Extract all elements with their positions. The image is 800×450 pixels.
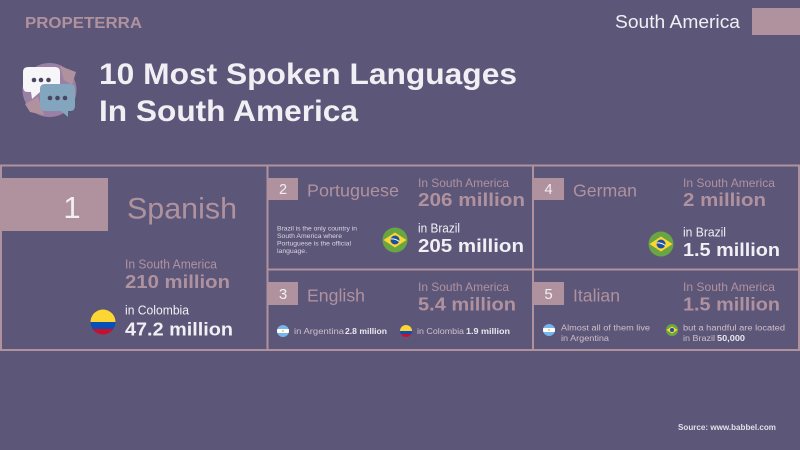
language name: English: English (307, 286, 365, 306)
language name: Portuguese: Portuguese (307, 180, 399, 200)
stat: Colombia: in Colombia (125, 304, 189, 318)
stat: Colombia (125, 304, 233, 340)
icon: Argentina flag (543, 324, 555, 336)
stat: Colombia: in Colombia (417, 327, 465, 336)
stat: Brazil: 1.5 million (683, 240, 780, 260)
note: Brazil: but a handful are located (683, 324, 785, 332)
rank badge 5 (534, 282, 564, 305)
language name: German: German (573, 180, 637, 200)
rank badge 1 (0, 178, 108, 231)
icon: Brazil flag (382, 228, 408, 252)
icon: speech bubbles (22, 63, 76, 117)
stat: South America total (125, 258, 230, 292)
stat: South America total: 2 million (683, 190, 766, 210)
title (99, 58, 517, 128)
note: Argentina: in Argentina (561, 334, 610, 343)
stat: South America total: 206 million (418, 190, 525, 210)
stat: South America total: In South America (125, 258, 217, 272)
panel: German (534, 176, 780, 260)
region label: South America: South America (615, 12, 741, 32)
stat: South America total (418, 280, 516, 314)
stat: Brazil (683, 226, 780, 260)
stat: South America total: In South America (683, 176, 775, 190)
note: official language: South America where (277, 234, 343, 240)
stat: South America total: In South America (418, 176, 509, 190)
note: Argentina: Almost all of them live (561, 324, 651, 332)
language name: Spanish: Spanish (127, 192, 237, 226)
rank number 5: 5 (544, 286, 553, 303)
stat: Argentina: 2.8 million (345, 327, 387, 336)
icon: Colombia flag (400, 325, 412, 337)
stat: South America total (418, 176, 525, 210)
stat: South America total: 1.5 million (683, 294, 780, 314)
note: official language (277, 226, 357, 255)
note: Brazil (683, 324, 785, 343)
icon: Brazil flag (648, 232, 674, 256)
note: official language: Brazil is the only country in (277, 226, 357, 232)
stat: Brazil (418, 222, 524, 256)
panel: Portuguese (268, 176, 525, 256)
panel: Italian (534, 280, 785, 343)
note: official language: Portuguese is the official (277, 242, 351, 248)
panel: English (268, 280, 516, 337)
stat: South America total: In South America (683, 280, 775, 294)
rank number 2: 2 (279, 182, 287, 198)
note: official language: language. (277, 249, 307, 255)
rank number 3: 3 (279, 286, 287, 303)
stat: Colombia: 47.2 million (125, 320, 233, 340)
title: In South America (99, 95, 359, 128)
source: Source: www.babbel.com (678, 423, 776, 432)
language name: Italian: Italian (573, 286, 620, 306)
panel: Spanish (0, 178, 237, 340)
rank number 4: 4 (544, 182, 553, 198)
stat: South America total (683, 176, 775, 210)
rank number 1: 1 (63, 190, 81, 225)
note: Brazil: in Brazil (683, 334, 715, 343)
stat: Brazil: in Brazil (418, 222, 460, 236)
icon: Brazil flag (666, 324, 678, 336)
stat: Brazil: 205 million (418, 236, 524, 256)
icon: Argentina flag (277, 325, 289, 337)
title: 10 Most Spoken Languages (99, 58, 517, 91)
note: Argentina (561, 324, 651, 343)
stat: Brazil: in Brazil (683, 226, 726, 240)
icon: Colombia flag (90, 310, 116, 334)
stat: South America total: 5.4 million (418, 294, 516, 314)
logo: Propeterra: PROPETERRA (25, 15, 142, 32)
rank badge 2 (268, 178, 298, 200)
note: Brazil: 50,000 (717, 334, 746, 343)
stat: South America total (683, 280, 780, 314)
stat: South America total: 210 million (125, 272, 230, 292)
stat: South America total: In South America (418, 280, 509, 294)
region accent block (752, 8, 800, 35)
stat: Colombia: 1.9 million (466, 327, 510, 336)
stat: Argentina: in Argentina (294, 327, 345, 336)
table grid (1, 165, 799, 350)
rank badge 3 (268, 282, 298, 305)
rank badge 4 (534, 178, 564, 200)
